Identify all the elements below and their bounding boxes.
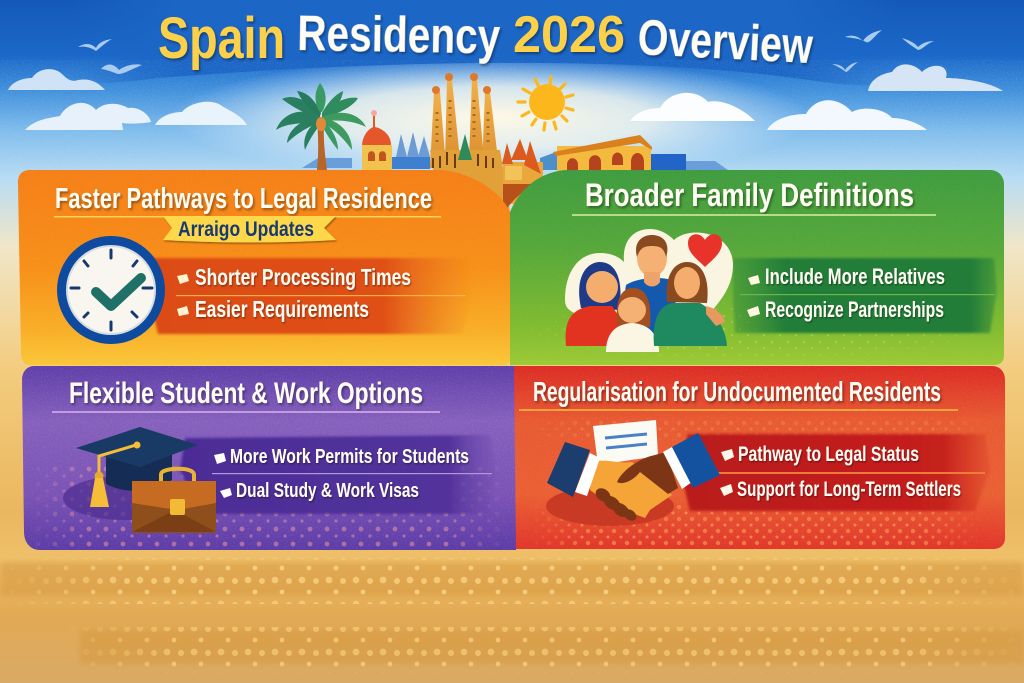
icon: graduation cap	[63, 427, 198, 520]
birds	[78, 30, 934, 74]
panel: faster pathways (orange)	[18, 170, 510, 365]
icon: handshake with document	[546, 420, 720, 526]
icon: Sagrada Familia	[430, 73, 510, 212]
panel: family definitions (green)	[510, 170, 1004, 365]
panel: student and work (purple)	[22, 366, 516, 550]
strip: purple benefits	[180, 435, 496, 514]
list: green benefits: Include More Relatives	[765, 264, 945, 289]
heading: student and work: Flexible Student & Work Options	[69, 377, 423, 410]
strip: green benefits	[733, 258, 997, 333]
title: 2026	[513, 6, 625, 64]
strip: red benefits	[680, 434, 990, 511]
sand dune dot rows	[0, 558, 1024, 673]
clouds	[8, 64, 1003, 130]
title	[158, 5, 814, 74]
list: green benefits	[747, 264, 945, 322]
list: green benefits: Recognize Partnerships	[765, 297, 944, 322]
sky glow behind skyline	[170, 56, 810, 180]
panel: regularisation (red)	[514, 366, 1005, 549]
strip: orange benefits	[150, 258, 474, 334]
list: orange benefits	[177, 264, 411, 322]
grain over sky	[0, 60, 1024, 170]
list: red benefits: Pathway to Legal Status	[738, 443, 919, 466]
skyline: distant blue buildings	[302, 132, 728, 170]
title: Residency	[297, 5, 501, 65]
title: Spain	[158, 6, 285, 71]
icon: domed tower	[362, 110, 392, 170]
icon: red rooftops	[502, 139, 543, 210]
icon: briefcase	[132, 469, 216, 533]
list: orange benefits: Easier Requirements	[195, 296, 369, 322]
ribbon: Arraigo Updates: Arraigo Updates	[178, 218, 314, 241]
list: purple benefits: More Work Permits for Students	[230, 446, 469, 468]
title: Overview	[636, 9, 814, 74]
title banner arc	[70, 0, 900, 86]
icon: family with heart	[565, 229, 733, 352]
icon: arched building	[553, 135, 652, 171]
icon: palm tree	[276, 83, 366, 170]
list: orange benefits: Shorter Processing Times	[195, 264, 411, 290]
icon: clock with check	[57, 236, 165, 344]
heading: faster pathways: Faster Pathways to Legal Residence	[55, 183, 432, 215]
list: purple benefits	[214, 446, 469, 502]
icon: sun	[518, 77, 573, 130]
heading: family definitions: Broader Family Definitions	[585, 177, 914, 213]
list: red benefits	[720, 443, 961, 501]
list: purple benefits: Dual Study & Work Visas	[236, 480, 419, 502]
